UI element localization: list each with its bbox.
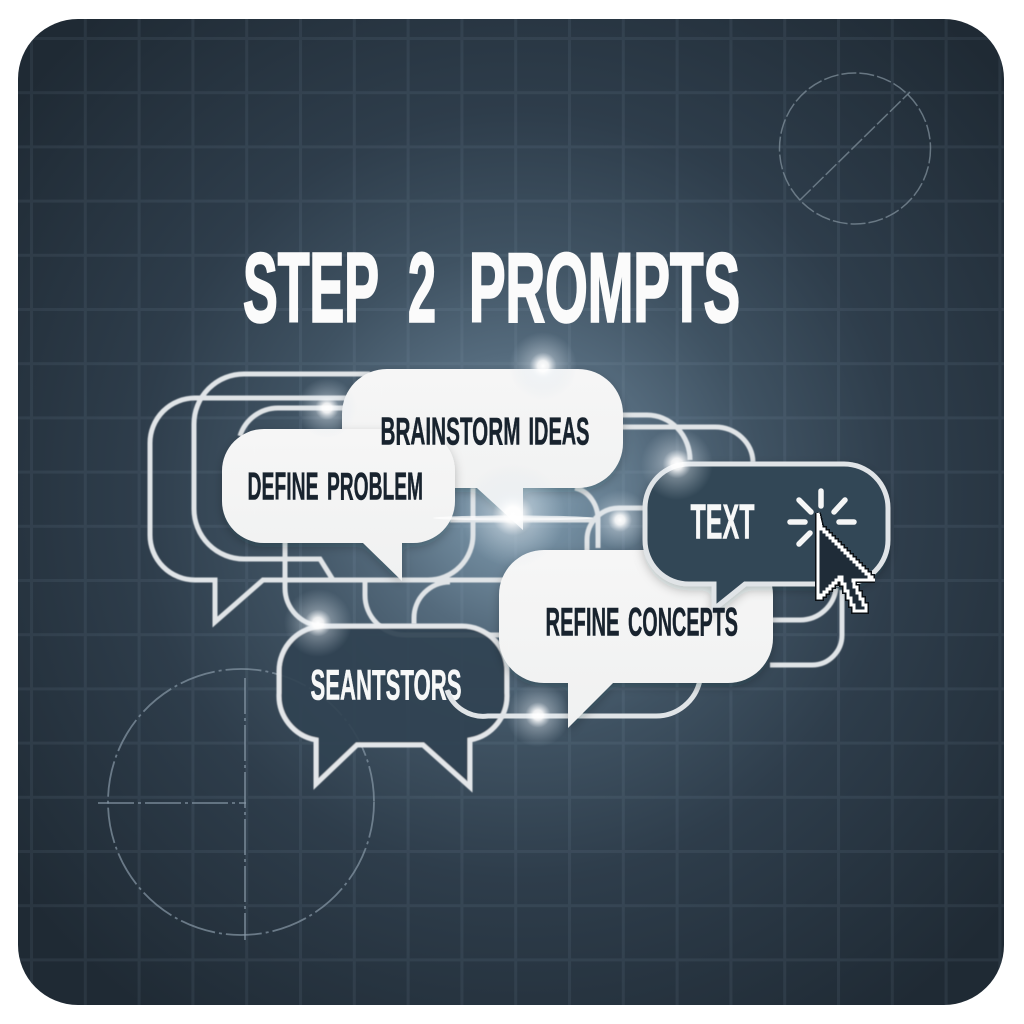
bubble: define problem: [222, 429, 455, 581]
title: [243, 232, 740, 342]
bubble: refine concepts: [499, 550, 773, 728]
title: 2: [408, 232, 436, 342]
label: text: TEXT: [690, 496, 755, 550]
label: refine concepts: REFINE: [546, 600, 620, 644]
bubble: text: [645, 464, 888, 609]
label: brainstorm ideas: IDEAS: [528, 410, 590, 454]
title: PROMPTS: [469, 232, 740, 342]
title: STEP: [243, 232, 379, 342]
infographic canvas: PROBLEM: [327, 466, 423, 508]
infographic canvas: CONCEPTS: [628, 600, 738, 644]
icon: cursor arrow: [818, 513, 875, 611]
label: seantstors: SEANTSTORS: [310, 662, 462, 710]
bubble: seantstors: [279, 626, 507, 787]
label: define problem: DEFINE: [248, 466, 318, 508]
icon: click rays: [790, 491, 854, 544]
label: brainstorm ideas: BRAINSTORM: [380, 410, 520, 454]
light glows: [284, 332, 713, 747]
drafting circle: bottom left: [98, 669, 374, 940]
drafting circle: top right: [780, 73, 930, 224]
connector line: bottom loop: [447, 680, 700, 716]
connected outline bubbles: [150, 374, 842, 665]
bubble: brainstorm ideas: [342, 369, 623, 530]
